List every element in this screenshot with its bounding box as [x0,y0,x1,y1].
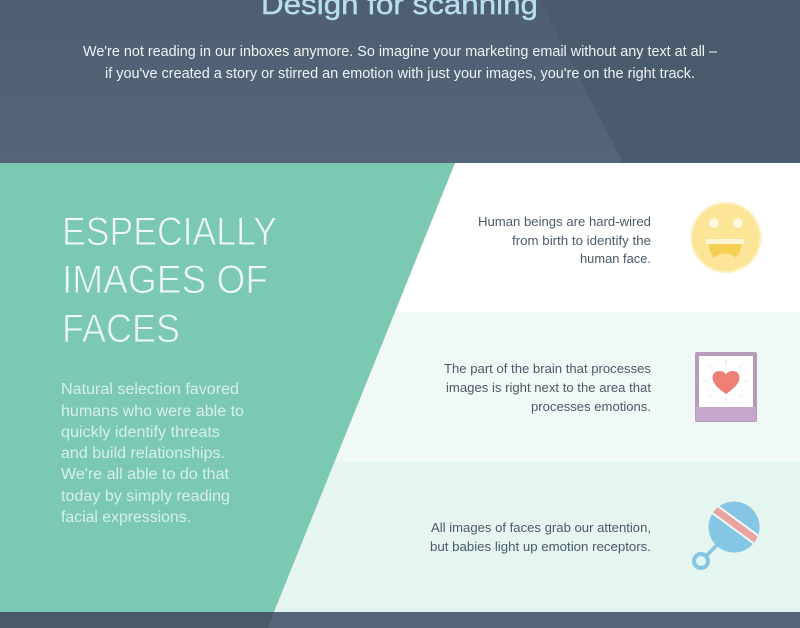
text block: scanning description: if you've created a story or stirred an emotion with just your images, you're on the right track. [105,65,695,82]
text block: babies [430,520,651,554]
panel: design for scanning header [0,0,800,163]
text block: brain emotions: processes emotions. [531,399,651,414]
text block: brain emotions: images is right next to the area that [446,380,651,395]
icon: polaroid with heart [695,352,757,422]
text block: scanning description: We're not reading in our inboxes anymore. So imagine your marketing email without any text at all – [83,43,718,60]
heading: especially images of faces: FACES [62,307,180,351]
text block: natural selection: today by simply reading [61,488,230,505]
text block: brain emotions: The part of the brain that processes [444,361,651,376]
panel: row backgrounds [0,163,800,612]
text block: natural selection: humans who were able to [61,403,244,420]
heading: especially images of faces [62,210,277,351]
text block: natural selection [61,381,244,526]
text block: natural selection: and build relationships. [61,445,225,462]
text block: hard-wired [478,214,651,266]
text block: natural selection: Natural selection favored [61,381,239,398]
text block: natural selection: facial expressions. [61,509,191,526]
text block: natural selection: quickly identify threats [61,424,220,441]
heading: especially images of faces: IMAGES OF [62,258,268,302]
text block: hard-wired: from birth to identify the [512,233,651,248]
text block: hard-wired: Human beings are hard-wired [478,214,651,229]
panel: bottom band [0,612,800,628]
text block: hard-wired: human face. [580,251,651,266]
text block: babies: but babies light up emotion receptors. [430,539,651,554]
text block: scanning description [83,43,718,82]
text block: brain emotions [444,361,651,414]
panel: especially images of faces [0,163,455,612]
icon: smiley face [690,202,762,273]
icon: baby rattle [694,502,760,568]
text block: babies: All images of faces grab our attention, [431,520,651,535]
heading: especially images of faces: ESPECIALLY [62,210,277,254]
text block: natural selection: We're all able to do that [61,466,230,483]
